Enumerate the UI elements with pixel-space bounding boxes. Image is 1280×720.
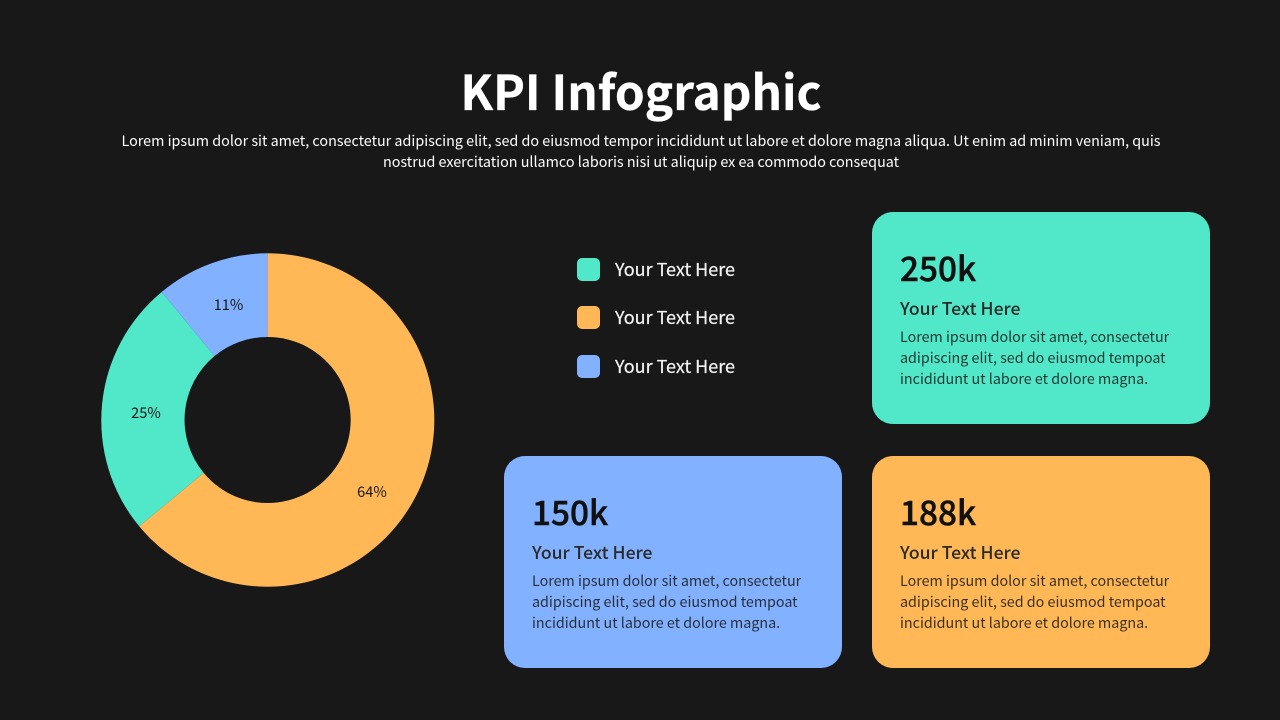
card body text: Lorem ipsum dolor sit amet, consectetur [900,326,1169,346]
segment: 11% blue [162,253,268,356]
panel: 150k blue card [504,456,842,668]
card number: 188k [900,486,976,535]
segment: 25% teal [101,292,214,526]
legend label 3: Your Text Here [615,353,735,379]
title: KPI Infographic [460,54,822,124]
card body text: incididunt ut labore et dolore magna. [900,612,1148,632]
legend swatch: teal [577,258,600,280]
label: 64%: 64% [357,481,387,502]
legend swatch: orange [577,306,600,329]
card body text: incididunt ut labore et dolore magna. [532,612,780,632]
card body text [900,326,1170,388]
card body text: Lorem ipsum dolor sit amet, consectetur [532,570,801,590]
panel: 188k orange card [872,456,1210,668]
card number: 250k [900,242,976,291]
subtitle text: nostrud exercitation ullamco laboris nisi ut aliquip ex ea commodo consequat [383,150,899,172]
card heading: Your Text Here [900,296,1020,320]
card body text: Lorem ipsum dolor sit amet, consectetur [900,570,1169,590]
card body text: adipiscing elit, sed do eiusmod tempoat [900,590,1166,612]
subtitle text [121,130,1161,172]
card body text: incididunt ut labore et dolore magna. [900,368,1148,388]
card body text: adipiscing elit, sed do eiusmod tempoat [900,346,1166,368]
panel: 250k teal card [872,212,1210,424]
legend label 2: Your Text Here [615,304,735,330]
card heading: Your Text Here [532,540,652,564]
card number: 150k [532,486,608,535]
card body text [900,570,1170,632]
subtitle text: Lorem ipsum dolor sit amet, consectetur adipiscing elit, sed do eiusmod tempor incididunt ut labore et dolore magna aliqua. Ut enim ad minim veniam, quis [121,130,1161,150]
segment: 64% orange [139,253,434,587]
legend swatch: blue [577,354,600,378]
label: 11%: 11% [214,294,243,315]
label: 25%: 25% [131,402,161,423]
card body text: adipiscing elit, sed do eiusmod tempoat [532,590,798,612]
legend label 1: Your Text Here [615,256,735,282]
donut chart [101,253,434,587]
legend [577,256,735,379]
card body text [532,570,802,632]
card heading: Your Text Here [900,540,1020,564]
